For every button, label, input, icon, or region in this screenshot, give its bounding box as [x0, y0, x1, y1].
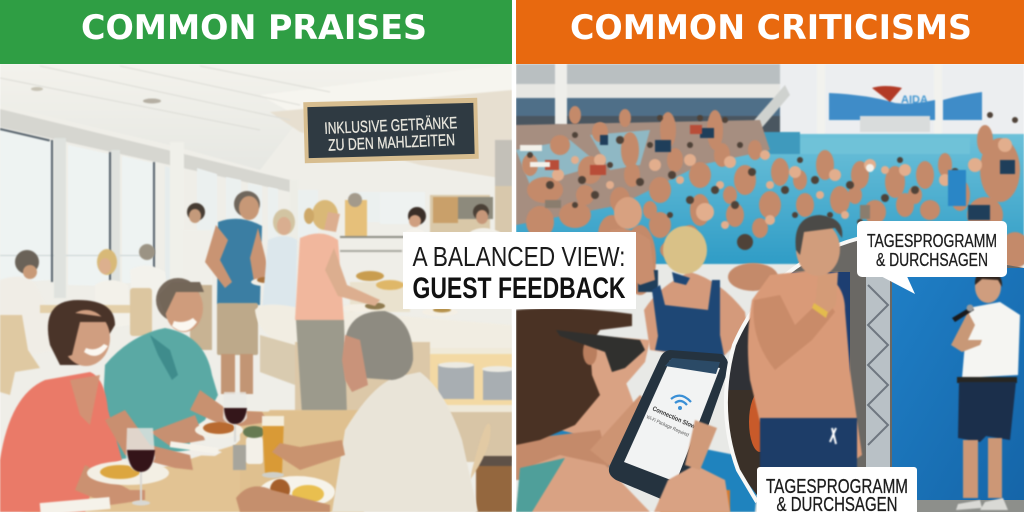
ceiling and back wall [0, 64, 512, 512]
hanging sign: inklusive getraenke: INKLUSIVE GETRÄNKE [324, 114, 458, 138]
center title box: GUEST FEEDBACK [412, 272, 626, 305]
thinking shirtless man [748, 215, 862, 470]
hanging sign: inklusive getraenke: ZU DEN MAHLZEITEN [328, 131, 455, 155]
white ring around the inset [726, 238, 860, 502]
woman at the buffet in peach top [295, 200, 380, 415]
upper deck and pool backdrop: AIDA [901, 94, 928, 106]
wine glasses and beer [126, 392, 284, 506]
banner: common praises [0, 0, 512, 64]
standing man in blue t-shirt [186, 190, 267, 395]
foreground lounger [546, 425, 760, 512]
woman checking phone [516, 308, 655, 512]
man in teal polo [100, 278, 268, 462]
speech bubble: top right [857, 221, 1007, 294]
panel: common praises restaurant scene [0, 64, 514, 512]
smartphone with wifi message [609, 350, 728, 503]
inset: guest and crew announcement [720, 230, 1024, 512]
caption box: bottom [757, 467, 917, 512]
buffet back counter [429, 140, 512, 232]
banner: common criticisms [516, 0, 1024, 64]
background diners [0, 244, 168, 395]
upper deck and pool backdrop [516, 64, 1024, 512]
smartphone with wifi message: Wi-Fi Package Required [645, 414, 690, 439]
buffet counter with food [255, 193, 514, 462]
woman in navy swimsuit from behind [644, 226, 750, 360]
dining table [20, 410, 364, 512]
banner: common criticisms: COMMON CRITICISMS [570, 8, 972, 48]
crew member speaking with microphone [951, 271, 1020, 510]
woman in coral top [0, 300, 193, 512]
windows [0, 128, 425, 307]
crowd in the pool [520, 106, 1024, 295]
hanging sign: inklusive getraenke [303, 98, 479, 163]
plates and food on table [40, 422, 335, 512]
holding hand over phone [654, 420, 730, 512]
right foreground deck and chair [470, 423, 512, 512]
caption box: bottom: TAGESPROGRAMM [766, 475, 908, 498]
speech bubble: top right: & DURCHSAGEN [876, 249, 988, 270]
smartphone with wifi message: Connection Slow [651, 405, 697, 431]
bald man at pool [610, 197, 655, 285]
banner: common praises: COMMON PRAISES [81, 8, 427, 48]
center title box: A BALANCED VIEW: [412, 241, 626, 272]
older man in white shirt from behind [236, 311, 478, 512]
panel: common criticisms pool deck scene [516, 64, 1024, 512]
center title box [403, 232, 636, 309]
